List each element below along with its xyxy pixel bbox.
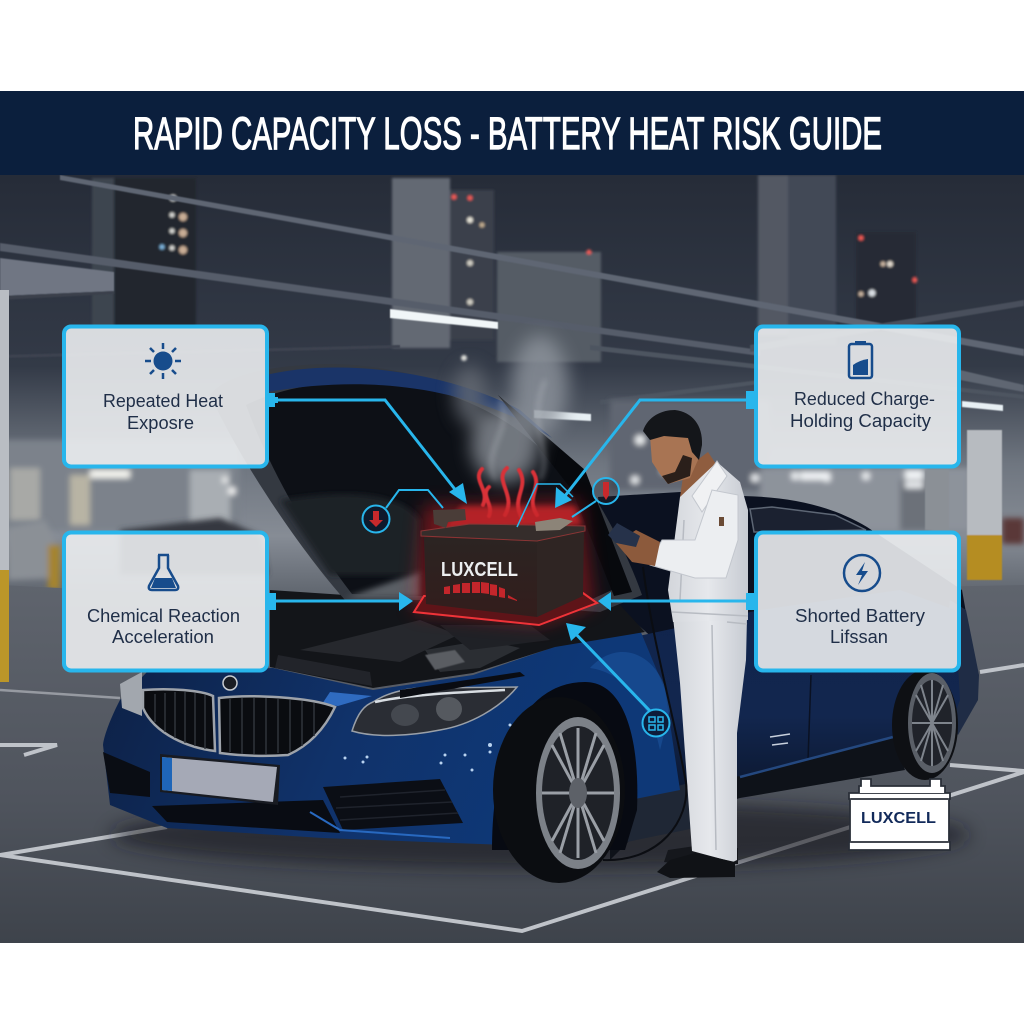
panel: repeated heat exposure [64,326,267,466]
test cable [603,567,686,860]
blue fender highlight [590,652,670,750]
connector arrows [268,391,754,711]
panel text: Reduced Charge- [794,389,935,409]
battery front face [424,537,537,617]
panel: reduced charge-holding capacity [756,326,959,466]
rear wheel [892,670,958,780]
car front body [103,630,680,845]
lower splitter [152,800,340,833]
connector tab bottom left [268,593,276,610]
battery side face [537,529,584,617]
front wheel [493,697,625,883]
connector tab top right [746,391,754,409]
red glow [414,500,594,624]
arrowhead: heat exposure [449,483,467,504]
right lower intake [323,779,463,830]
LUXCELL battery label: LUXCELL [441,559,518,581]
ceiling beams [0,175,1024,405]
icon: battery [849,341,872,378]
overheating battery [414,468,597,625]
left headlight [120,672,142,716]
pocket and crease lines [672,520,748,850]
connector tab bottom right [746,593,754,610]
background cars [8,518,1024,590]
panel text [103,391,223,433]
heat base plate [414,593,597,625]
badge [223,676,237,690]
neck [680,452,716,497]
warning marker right [593,478,619,504]
panel text [795,606,925,647]
front wheel arch [492,682,637,850]
car rear bumper [940,600,979,735]
panel text: Acceleration [112,627,214,647]
paint specks [344,724,512,772]
arm patch [719,517,724,526]
arrowhead: chemical reaction [399,592,413,611]
engine bay [270,590,645,698]
steam rising from battery [454,335,568,483]
head [650,430,698,484]
car [103,364,979,883]
open hood [210,364,642,612]
panel text: Chemical Reaction [87,606,240,626]
hair [643,410,702,460]
connector tab top left [268,393,278,407]
bonnet lip highlight [322,692,372,706]
right headlight [352,687,517,735]
right column [925,430,1002,580]
car rocker panel [612,782,695,845]
left terminal [433,509,466,528]
arrowhead: lower callout [566,623,586,641]
parking garage background scene [0,175,1024,943]
panel text: Exposre [127,413,194,433]
panel text: Shorted Battery [795,606,925,626]
car underside sill [610,737,905,860]
diagnostic tool [608,523,640,547]
warning marker left [362,506,390,532]
door line and sill trim [636,675,893,800]
distant city buildings [92,175,918,362]
front shoe [657,853,735,878]
left column [0,290,9,682]
kidney grille [143,689,335,756]
panel text [790,389,935,431]
blue splitter highlight [310,812,450,838]
coverall collar [692,461,727,512]
far parking level [0,400,970,530]
torso [668,462,748,622]
left lower intake [103,752,150,797]
man in white coverall [603,410,748,878]
legs [673,617,747,862]
hands holding diagnostic tool [616,530,660,566]
logo text: LUXCELL [861,810,936,827]
arrowhead: battery lifespan [598,592,611,611]
title band [0,91,1024,175]
car cabin and windows [598,492,978,680]
circuit marker [642,710,670,736]
right terminal [535,518,573,531]
ground shadow [110,801,970,869]
arrowhead: charge capacity [555,487,572,508]
back shoe [664,846,738,866]
panel text: Holding Capacity [790,411,931,431]
floor [0,585,1024,943]
beard [662,455,692,484]
ceiling lights [390,309,1003,421]
icon: lightning bolt [844,555,880,591]
sleeve [650,490,738,578]
flames [479,468,537,518]
LUXCELL battery logo [849,779,950,850]
charge gauge [444,582,517,601]
battery lid [421,524,585,541]
battery lid glow [440,506,582,530]
panel: chemical reaction acceleration [64,532,267,670]
parking lines [0,665,1024,931]
car side body [620,590,960,800]
panel text [87,606,240,647]
panel: shorted battery lifespan [756,532,959,670]
icon: flask [149,555,178,590]
license plate [160,754,280,805]
icon: sun [145,343,181,379]
panel text: Lifssan [830,627,888,647]
panel text: Repeated Heat [103,391,223,411]
